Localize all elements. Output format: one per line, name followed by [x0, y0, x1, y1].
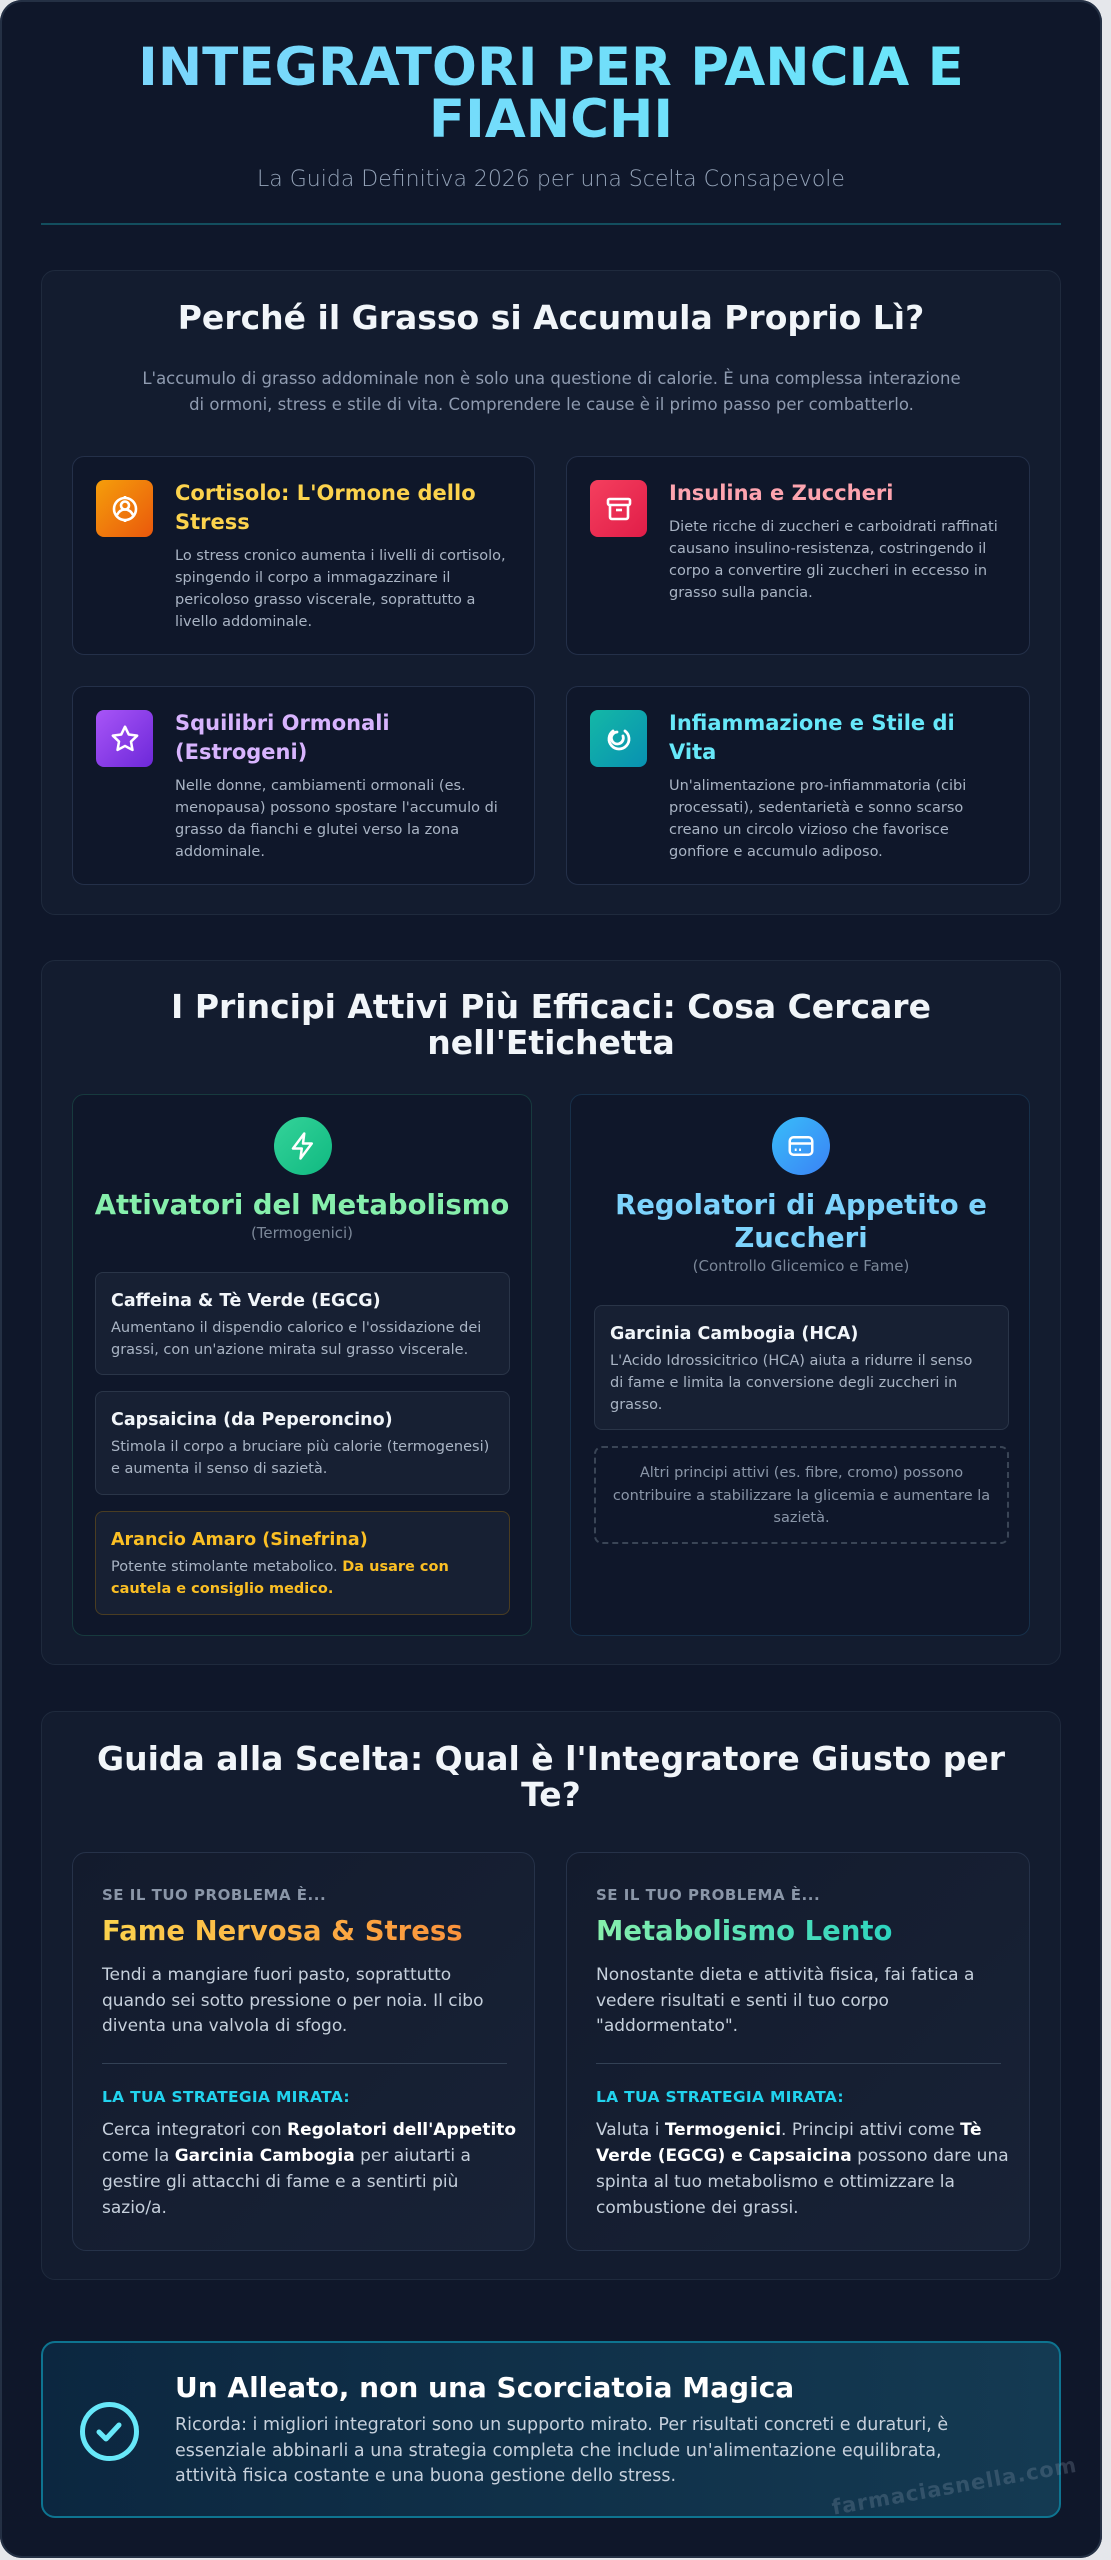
- strategy label: LA TUA STRATEGIA MIRATA:: [102, 2088, 350, 2106]
- note: other actives: [594, 1446, 1009, 1544]
- panel: choice guide: [41, 1711, 1061, 2280]
- item: arancio amaro: [95, 1511, 510, 1615]
- column title: Attivatori del Metabolismo: [95, 1189, 509, 1221]
- callout text: Ricorda: i migliori integratori sono un supporto mirato. Per risultati concreti e duraturi, è essenziale abbinarli a una strategia completa che include un'alimentazione equilibrata, attività fisica costante e una buona gestione dello stress.: [175, 2415, 948, 2486]
- item: capsaicina: Stimola il corpo a bruciare più calorie (termogenesi) e aumenta il senso di sazietà.: [111, 1439, 489, 1477]
- column title: (Controllo Glicemico e Fame): [693, 1257, 909, 1275]
- heading: choice guide: Guida alla Scelta: Qual è l'Integratore Giusto per: [97, 1739, 1005, 1778]
- heading: causes: Perché il Grasso si Accumula Proprio Lì?: [178, 298, 924, 337]
- icon: star: [96, 710, 153, 767]
- card: squilibri ormonali: [72, 686, 535, 885]
- problem description: Nonostante dieta e attività fisica, fai fatica a vedere risultati e senti il tuo corpo "addormentato".: [596, 1965, 974, 2036]
- heading: active ingredients: [171, 987, 931, 1062]
- column: appetite regulators: [570, 1094, 1030, 1636]
- intro paragraph: L'accumulo di grasso addominale non è solo una questione di calorie. È una complessa interazione di ormoni, stress e stile di vita. Comprendere le cause è il primo passo per combatterlo.: [142, 369, 961, 414]
- icon: lightning: [274, 1117, 332, 1175]
- problem title: Metabolismo Lento: [596, 1915, 892, 1947]
- icon: card: [772, 1117, 830, 1175]
- icon: swirl: [590, 710, 647, 767]
- problem label: SE IL TUO PROBLEMA È...: [596, 1886, 820, 1904]
- watermark: farmaciasnella.com: [830, 2453, 1079, 2520]
- card: fame nervosa: [72, 1852, 535, 2251]
- card title + text: [669, 481, 998, 601]
- column title: Regolatori di Appetito e Zuccheri: [615, 1189, 987, 1254]
- column title: [94, 1189, 509, 1242]
- problem title: Fame Nervosa & Stress: [102, 1915, 463, 1947]
- card: cortisolo: [72, 456, 535, 655]
- item: arancio amaro: Potente stimolante metabolico. Da usare con cautela e consiglio medico.: [111, 1559, 449, 1597]
- icon: target person: [96, 480, 153, 537]
- heading: choice guide: Te?: [521, 1775, 581, 1814]
- card title + text: Insulina e Zuccheri: [669, 481, 893, 505]
- card title + text: Lo stress cronico aumenta i livelli di cortisolo, spingendo il corpo a immagazzinare il pericoloso grasso viscerale, soprattutto a livello addominale.: [175, 548, 506, 630]
- callout title: Un Alleato, non una Scorciatoia Magica: [175, 2371, 794, 2404]
- card: metabolismo lento: [566, 1852, 1030, 2251]
- card title + text: [175, 481, 506, 630]
- strategy text: Valuta i Termogenici. Principi attivi come Tè Verde (EGCG) e Capsaicina possono dare una spinta al tuo metabolismo e ottimizzare la combustione dei grassi.: [596, 2120, 1009, 2218]
- title: [0, 42, 1102, 146]
- column title: (Termogenici): [251, 1224, 353, 1242]
- column: metabolism activators: [72, 1094, 532, 1636]
- problem label: SE IL TUO PROBLEMA È...: [102, 1886, 326, 1904]
- card: infiammazione: [566, 686, 1030, 885]
- icon: box: [590, 480, 647, 537]
- card title + text: Un'alimentazione pro-infiammatoria (cibi processati), sedentarietà e sonno scarso creano un circolo vizioso che favorisce gonfiore e accumulo adiposo.: [669, 778, 966, 860]
- callout: ally not shortcut: [41, 2341, 1061, 2518]
- item: capsaicina: Capsaicina (da Peperoncino): [111, 1410, 393, 1430]
- item: garcinia: Garcinia Cambogia (HCA): [610, 1324, 858, 1344]
- item: caffeina: [95, 1272, 510, 1375]
- icon: check circle: [80, 2402, 139, 2461]
- item: garcinia: L'Acido Idrossicitrico (HCA) aiuta a ridurre il senso di fame e limita la conversione degli zuccheri in grasso.: [610, 1353, 972, 1413]
- item: capsaicina: [95, 1391, 510, 1495]
- strategy label: LA TUA STRATEGIA MIRATA:: [596, 2088, 844, 2106]
- card title + text: Infiammazione e Stile di Vita: [669, 711, 955, 764]
- title: FIANCHI: [429, 89, 673, 150]
- card title + text: Cortisolo: L'Ormone dello Stress: [175, 481, 476, 534]
- note: other actives: Altri principi attivi (es. fibre, cromo) possono contribuire a stabilizzare la glicemia e aumentare la sazietà.: [613, 1465, 990, 1526]
- panel: causes: [41, 270, 1061, 915]
- subtitle: La Guida Definitiva 2026 per una Scelta Consapevole: [257, 167, 845, 192]
- problem description: Tendi a mangiare fuori pasto, soprattutto quando sei sotto pressione o per noia. Il cibo diventa una valvola di sfogo.: [102, 1965, 484, 2036]
- item: caffeina: Aumentano il dispendio calorico e l'ossidazione dei grassi, con un'azione mirata sul grasso viscerale.: [111, 1320, 481, 1358]
- strategy text: Cerca integratori con Regolatori dell'Appetito come la Garcinia Cambogia per aiutarti a gestire gli attacchi di fame e a sentirti più sazio/a.: [102, 2120, 516, 2218]
- card title + text: Nelle donne, cambiamenti ormonali (es. menopausa) possono spostare l'accumulo di grasso da fianchi e glutei verso la zona addominale.: [175, 778, 498, 860]
- item: arancio amaro: Arancio Amaro (Sinefrina): [111, 1530, 368, 1550]
- panel: active ingredients: [41, 960, 1061, 1665]
- title: INTEGRATORI PER PANCIA E: [138, 37, 964, 98]
- item: garcinia: [594, 1305, 1009, 1430]
- card title + text: [175, 711, 498, 860]
- card title + text: Diete ricche di zuccheri e carboidrati raffinati causano insulino-resistenza, costringendo il corpo a convertire gli zuccheri in eccesso in grasso sulla pancia.: [669, 519, 998, 601]
- card title + text: Squilibri Ormonali (Estrogeni): [175, 711, 390, 764]
- heading: active ingredients: nell'Etichetta: [427, 1023, 675, 1062]
- heading: choice guide: [97, 1739, 1005, 1814]
- heading: active ingredients: I Principi Attivi Più Efficaci: Cosa Cercare: [171, 987, 931, 1026]
- card: insulina: [566, 456, 1030, 655]
- item: caffeina: Caffeina & Tè Verde (EGCG): [111, 1291, 381, 1311]
- card title + text: [669, 711, 966, 860]
